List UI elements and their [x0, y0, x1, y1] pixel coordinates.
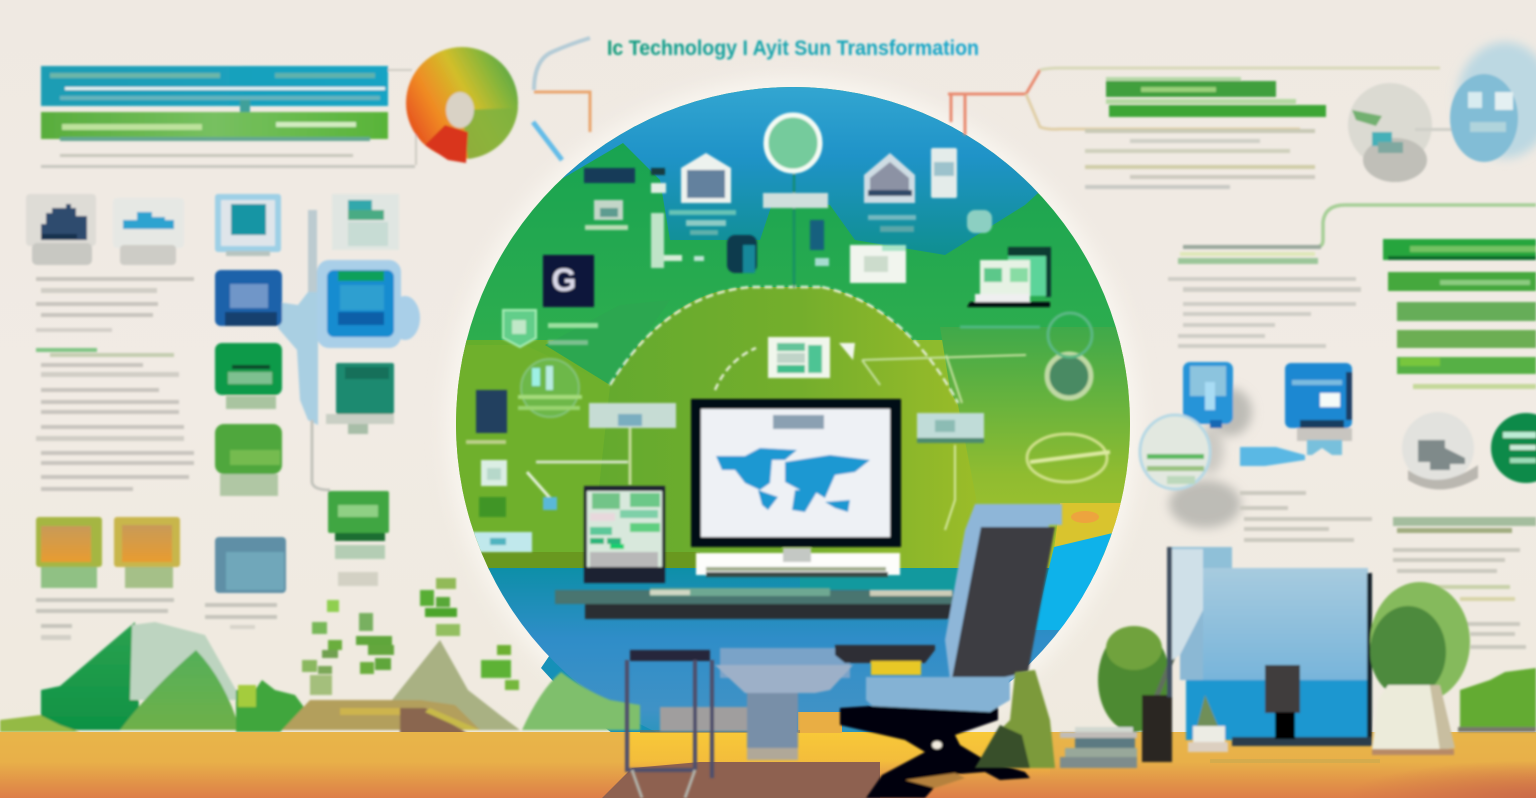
office chair	[835, 504, 1062, 798]
center small card	[768, 337, 855, 378]
small dark devices	[584, 168, 829, 273]
right gauge icons	[960, 313, 1110, 482]
icon column tiles	[215, 194, 286, 593]
left landscape	[0, 578, 640, 738]
left badge	[518, 359, 582, 417]
title: Ic Technology I Ayit Sun Transformation	[607, 37, 979, 60]
green list connector	[1183, 205, 1536, 247]
bubble with flow arrow	[1140, 415, 1342, 489]
panel: central globe	[450, 75, 1140, 770]
globe lower skirt	[541, 640, 700, 733]
right circular icons	[1402, 412, 1536, 490]
small potted plant	[1188, 695, 1228, 752]
large plant with pot	[1370, 582, 1470, 755]
connector lines top	[533, 38, 590, 160]
globe badge	[763, 115, 828, 208]
icon tiles second column	[317, 194, 420, 586]
floating labels	[466, 390, 984, 552]
blue board	[1167, 547, 1372, 746]
white card	[850, 245, 906, 283]
ground	[0, 712, 1536, 798]
network arcs	[527, 172, 1026, 530]
icon: donut chart	[406, 47, 518, 163]
laptop	[967, 247, 1051, 307]
books	[1060, 727, 1137, 768]
cloud icon tiles	[26, 194, 184, 265]
green heading bars	[1085, 77, 1326, 189]
connector lines top right	[948, 68, 1440, 135]
dark G tile: G	[552, 262, 576, 298]
mountains	[0, 622, 640, 738]
potted tree	[1098, 626, 1180, 762]
desk	[555, 588, 953, 678]
right text lower	[1240, 491, 1536, 649]
dark G tile	[543, 255, 594, 307]
desk frame	[627, 650, 712, 798]
monitor desk scene	[555, 399, 1062, 798]
green list bars	[1383, 239, 1536, 389]
right hill	[1458, 668, 1536, 732]
world map	[716, 448, 870, 512]
shield icon	[503, 310, 598, 347]
small text block bottom left	[36, 598, 277, 640]
top left banner bars	[41, 66, 416, 168]
panel: left column	[26, 38, 590, 640]
main monitor	[691, 399, 901, 577]
cone shrub	[975, 670, 1055, 768]
panel: right column	[948, 42, 1536, 649]
grey drop shadows	[1169, 388, 1352, 528]
top right round icons	[1348, 42, 1536, 182]
right text block	[1168, 245, 1361, 348]
right landscape	[975, 547, 1536, 768]
monitor stand	[660, 665, 853, 760]
pale blue connector band	[278, 210, 330, 490]
orange tiles	[36, 517, 180, 588]
tablet	[584, 486, 665, 583]
blue icon tiles	[1183, 362, 1352, 428]
left text block 1	[36, 277, 194, 332]
globe colour zones	[450, 75, 1140, 770]
left text block 2	[36, 348, 194, 491]
home icons	[669, 148, 992, 235]
plants	[302, 578, 519, 695]
